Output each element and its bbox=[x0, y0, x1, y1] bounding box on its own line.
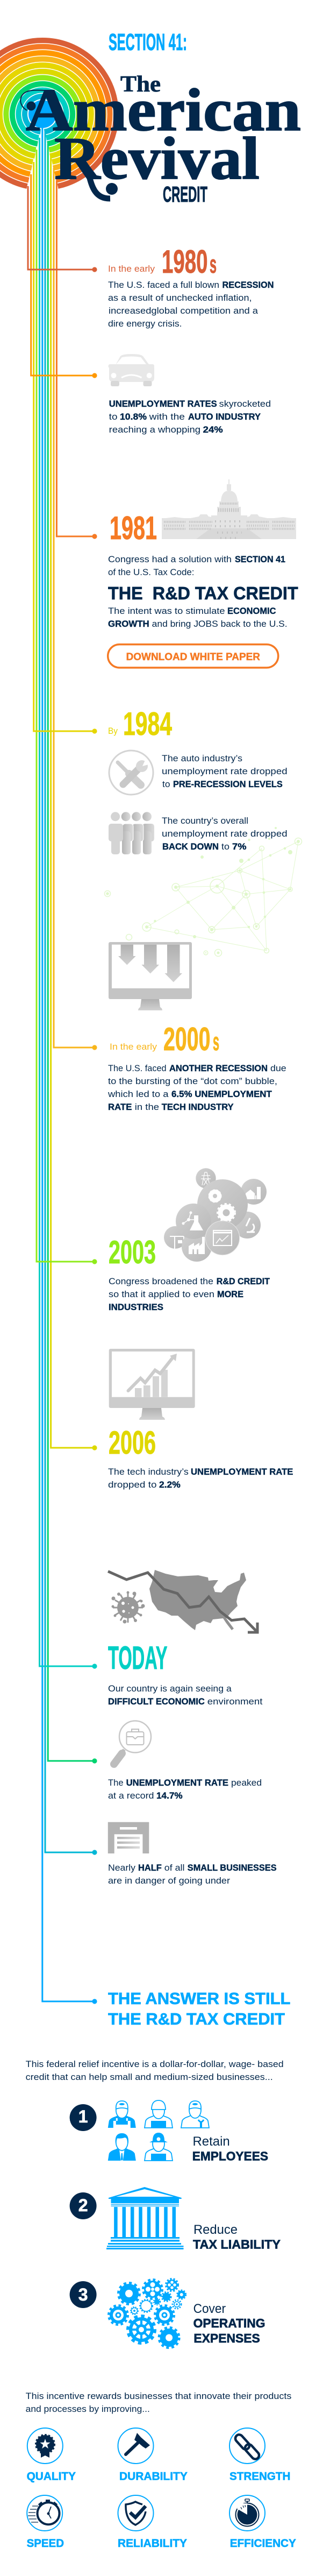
text: unemployment bbox=[109, 399, 271, 435]
text: peak unemployment: 14.7% bbox=[156, 1791, 183, 1801]
heading: 2006: 2006 bbox=[109, 1425, 156, 1461]
gear bbox=[155, 2306, 174, 2324]
text: broadened bbox=[109, 1276, 270, 1312]
section: early 2000s: s bbox=[213, 1028, 219, 1056]
text: country unemployment: unemployment rate dropped bbox=[162, 829, 288, 839]
icon: closed shop bbox=[108, 1822, 149, 1853]
gear bbox=[177, 2290, 186, 2299]
text: auto industry levels: PRE-RECESSION LEVELS bbox=[173, 779, 283, 789]
circle: power tower bbox=[196, 1168, 216, 1188]
circle: factory bbox=[182, 1232, 212, 1262]
badge: number 1: 1 bbox=[78, 2107, 88, 2126]
heading: in the early 1980s: s bbox=[210, 250, 217, 278]
label: DURABILITY bbox=[119, 2470, 188, 2482]
text: another recession: to the bursting of the “dot com” bubble, bbox=[108, 1076, 277, 1086]
icon: group of people bbox=[109, 812, 154, 854]
text: another recession: in the bbox=[135, 1102, 159, 1112]
text: country unemployment: BACK DOWN bbox=[162, 841, 219, 852]
section: 2003 bbox=[109, 1168, 270, 1312]
gear bbox=[109, 2306, 128, 2324]
button: download white paper: DOWNLOAD WHITE PAPER bbox=[126, 652, 260, 663]
text: auto industry levels: unemployment rate dropped bbox=[162, 766, 288, 776]
heading: 2003: 2003 bbox=[109, 1234, 156, 1270]
gear bbox=[143, 2280, 162, 2298]
heading: in the early 1980s: 1980 bbox=[162, 244, 207, 280]
text: federal relief incentive intro: This federal relief incentive is a dollar-for-dollar, wage- based bbox=[26, 2059, 284, 2069]
text: difficult environment bbox=[108, 1683, 263, 1707]
improvement: durability bbox=[118, 2428, 188, 2482]
gear bbox=[162, 2292, 171, 2302]
gear bbox=[166, 2279, 178, 2291]
text: broadened: R&D CREDIT bbox=[217, 1276, 270, 1286]
circle: chart window bbox=[205, 1221, 240, 1255]
benefit 3: cover operating expenses bbox=[70, 2279, 265, 2348]
improvement: speed bbox=[27, 2495, 64, 2550]
text: peak unemployment bbox=[108, 1778, 262, 1801]
worker: miner bbox=[145, 2133, 173, 2161]
label: RELIABILITY bbox=[118, 2537, 187, 2550]
heading: by 1984: By bbox=[108, 726, 118, 736]
text: difficult environment: Our country is again seeing a bbox=[108, 1683, 232, 1694]
text: another recession: which led to a bbox=[107, 1089, 169, 1099]
heading: by 1984: 1984 bbox=[123, 706, 172, 742]
section: today bbox=[108, 1570, 290, 2028]
badge: number 2: 2 bbox=[78, 2196, 88, 2215]
text: tech unemployment: 2.2% bbox=[159, 1480, 181, 1490]
text: broadened: so that it applied to even bbox=[109, 1289, 214, 1299]
eyebrow: section 41: SECTION 41: bbox=[109, 30, 187, 55]
text: recession: as a result of unchecked inflation, bbox=[108, 293, 252, 303]
text: unemployment: 10.8% bbox=[120, 412, 147, 422]
text: intent: The intent was to stimulate bbox=[108, 606, 225, 616]
badge: number 3 bbox=[70, 2281, 97, 2308]
title: credit: CREDIT bbox=[163, 182, 207, 207]
text: federal relief incentive intro bbox=[26, 2059, 284, 2082]
gear bbox=[128, 2316, 155, 2343]
icon: fast stopwatch bbox=[27, 2495, 62, 2531]
section: early 1980s bbox=[108, 244, 274, 435]
text: intent: GROWTH bbox=[108, 619, 149, 629]
icon: tools bbox=[109, 751, 153, 795]
gear bbox=[131, 2307, 138, 2315]
icon: chain link bbox=[229, 2428, 265, 2464]
improvement: efficiency bbox=[229, 2495, 296, 2550]
heading: the answer is still the r&d tax credit: THE ANSWER IS STILL bbox=[108, 1990, 290, 2008]
title block bbox=[20, 30, 301, 207]
title: The: The bbox=[120, 72, 161, 97]
rainbow rings bbox=[0, 40, 116, 186]
icon: monitor with down arrows bbox=[109, 942, 192, 1010]
icon: virus bbox=[112, 1591, 145, 1624]
text: country unemployment: to bbox=[221, 841, 229, 852]
text: another recession: due bbox=[270, 1063, 286, 1073]
icon: US map with falling line bbox=[108, 1570, 257, 1632]
icon: shield check bbox=[118, 2495, 154, 2531]
text: unemployment: skyrocketed bbox=[219, 399, 271, 409]
section: 2006 bbox=[108, 1349, 293, 1490]
circle: crane bbox=[164, 1226, 186, 1249]
heading: the answer is still the r&d tax credit bbox=[108, 1990, 290, 2028]
label: STRENGTH bbox=[229, 2470, 290, 2482]
text: peak unemployment: The bbox=[108, 1778, 124, 1788]
heading: today: TODAY bbox=[108, 1640, 168, 1676]
text: another recession: ANOTHER RECESSION bbox=[169, 1063, 268, 1073]
heading: by 1984 bbox=[108, 706, 172, 742]
text: tech unemployment: UNEMPLOYMENT RATE bbox=[191, 1467, 293, 1477]
label: SPEED bbox=[27, 2537, 64, 2550]
text: country unemployment: The country’s overall bbox=[162, 816, 248, 826]
text: another recession: RATE bbox=[108, 1102, 132, 1112]
badge: number 2 bbox=[70, 2192, 97, 2219]
text: small businesses bbox=[108, 1863, 277, 1886]
gear bbox=[140, 2299, 153, 2312]
worker: mechanic bbox=[181, 2101, 209, 2128]
text: recession: dire energy crisis. bbox=[108, 319, 182, 329]
icon: industry circles cluster bbox=[164, 1168, 267, 1262]
worker: overalls and cap bbox=[108, 2101, 136, 2128]
benefit 1: retain employees bbox=[70, 2100, 268, 2163]
text: incentive rewards intro bbox=[26, 2391, 291, 2414]
text: another recession: The U.S. faced bbox=[108, 1063, 167, 1073]
label: retain employees: EMPLOYEES bbox=[192, 2149, 268, 2163]
icon: cluster of gears bbox=[109, 2279, 186, 2348]
text: unemployment: 24% bbox=[203, 424, 223, 435]
gear bbox=[154, 2298, 160, 2305]
text: tech unemployment: dropped to bbox=[108, 1480, 157, 1490]
text: incentive rewards intro: and processes by improving... bbox=[26, 2404, 150, 2414]
gear bbox=[118, 2283, 140, 2304]
section: 1981 bbox=[108, 479, 298, 668]
label: retain employees bbox=[192, 2134, 268, 2163]
text: unemployment: UNEMPLOYMENT RATES bbox=[109, 399, 217, 409]
text: small businesses: HALF bbox=[138, 1863, 162, 1873]
icon: classical temple bbox=[106, 2187, 184, 2249]
label: cover operating expenses bbox=[193, 2302, 265, 2345]
text: small businesses: are in danger of going under bbox=[108, 1876, 230, 1886]
text: congress solution: Congress had a solution with bbox=[108, 554, 232, 564]
text: unemployment: reaching a whopping bbox=[109, 424, 200, 435]
text: intent bbox=[108, 606, 288, 629]
worker: business suit bbox=[108, 2133, 136, 2161]
icon: workers bbox=[108, 2100, 209, 2161]
text: unemployment: to bbox=[109, 412, 117, 422]
benefit 2: reduce tax liability bbox=[70, 2187, 281, 2252]
text: country unemployment bbox=[162, 816, 288, 852]
title: Revival: Revival bbox=[54, 125, 260, 192]
text: tech unemployment: The tech industry’s bbox=[108, 1467, 189, 1477]
heading: the r&d tax credit: THE R&D TAX CREDIT bbox=[108, 584, 298, 604]
icon: sad car bbox=[109, 354, 154, 386]
text: congress solution: SECTION 41 bbox=[235, 554, 285, 564]
heading: the answer is still the r&d tax credit: THE R&D TAX CREDIT bbox=[108, 2010, 285, 2028]
icon: capitol building bbox=[162, 479, 296, 539]
label: reduce tax liability: Reduce bbox=[193, 2223, 238, 2237]
label: cover operating expenses: OPERATING bbox=[193, 2316, 265, 2330]
improvement: strength bbox=[229, 2428, 290, 2482]
circle: gears bbox=[197, 1179, 248, 1230]
improvement: reliability bbox=[118, 2495, 187, 2550]
icon: magnifier with briefcase bbox=[114, 1721, 151, 1764]
text: small businesses: Nearly bbox=[108, 1863, 136, 1873]
section: 1984 bbox=[104, 706, 302, 957]
icon: timer bbox=[229, 2495, 265, 2531]
text: another recession bbox=[107, 1063, 286, 1112]
label: reduce tax liability: TAX LIABILITY bbox=[193, 2238, 281, 2252]
title: American: American bbox=[26, 77, 301, 144]
text: country unemployment: 7% bbox=[232, 841, 246, 852]
label: cover operating expenses: Cover bbox=[193, 2302, 226, 2316]
heading: 1981: 1981 bbox=[110, 510, 157, 546]
heading: in the early 2000s bbox=[110, 1021, 219, 1057]
text: incentive rewards intro: This incentive rewards businesses that innovate their products bbox=[26, 2391, 291, 2401]
text: another recession: TECH INDUSTRY bbox=[162, 1102, 234, 1112]
icon: hammer bbox=[118, 2428, 154, 2464]
icon: award badge bbox=[27, 2428, 63, 2464]
text: broadened: Congress broadened the bbox=[109, 1276, 213, 1286]
heading: in the early 1980s: In the early bbox=[108, 264, 155, 274]
text: congress solution bbox=[108, 554, 285, 577]
text: another recession: 6.5% UNEMPLOYMENT bbox=[171, 1089, 272, 1099]
text: small businesses: SMALL BUSINESSES bbox=[188, 1863, 277, 1873]
gear bbox=[173, 2300, 181, 2309]
heading: in the early 2000s: In the early bbox=[110, 1042, 157, 1052]
text: recession bbox=[108, 280, 274, 329]
worker: hard hat bbox=[145, 2100, 173, 2128]
circle: flask bbox=[176, 1204, 211, 1239]
text: broadened: INDUSTRIES bbox=[109, 1302, 163, 1312]
improvement: quality bbox=[27, 2428, 76, 2482]
text: auto industry levels: to bbox=[162, 779, 170, 789]
heading: in the early 2000s: 2000 bbox=[163, 1021, 211, 1057]
label: cover operating expenses: EXPENSES bbox=[193, 2331, 260, 2345]
text: recession: The U.S. faced a full blown bbox=[108, 280, 219, 290]
text: tech unemployment bbox=[108, 1467, 293, 1490]
timeline lines and connectors bbox=[28, 128, 97, 2004]
text: auto industry levels: The auto industry’s bbox=[162, 753, 242, 763]
circle: farm bbox=[241, 1179, 267, 1205]
text: auto industry levels bbox=[162, 753, 288, 789]
text: federal relief incentive intro: credit that can help small and medium-sized businesses... bbox=[26, 2072, 273, 2082]
text: unemployment: with the bbox=[149, 412, 185, 422]
text: difficult environment: DIFFICULT ECONOMIC bbox=[108, 1696, 205, 1707]
button: download white paper bbox=[108, 645, 278, 668]
badge: number 1 bbox=[70, 2104, 97, 2131]
label: retain employees: Retain bbox=[192, 2134, 230, 2149]
text: peak unemployment: UNEMPLOYMENT RATE bbox=[126, 1778, 228, 1788]
text: peak unemployment: peaked bbox=[231, 1778, 262, 1788]
text: congress solution: of the U.S. Tax Code: bbox=[108, 567, 195, 577]
label: reduce tax liability bbox=[193, 2223, 281, 2252]
text: small businesses: of all bbox=[164, 1863, 185, 1873]
badge: number 3: 3 bbox=[78, 2285, 88, 2304]
label: QUALITY bbox=[27, 2470, 76, 2482]
heading: in the early 1980s bbox=[108, 244, 217, 280]
icon: monitor with rising chart bbox=[109, 1349, 195, 1420]
network graphic bbox=[104, 827, 302, 957]
text: recession: RECESSION bbox=[222, 280, 274, 290]
text: intent: and bring JOBS back to the U.S. bbox=[152, 619, 288, 629]
section: early 2000s bbox=[107, 942, 286, 1112]
text: recession: increasedglobal competition and a bbox=[109, 306, 259, 316]
circle: microscope bbox=[234, 1212, 261, 1239]
label: EFFICIENCY bbox=[230, 2537, 296, 2550]
text: unemployment: AUTO INDUSTRY bbox=[188, 412, 261, 422]
text: peak unemployment: at a record bbox=[108, 1791, 154, 1801]
text: intent: ECONOMIC bbox=[227, 606, 276, 616]
text: broadened: MORE bbox=[217, 1289, 243, 1299]
gear bbox=[159, 2327, 179, 2348]
text: difficult environment: environment bbox=[207, 1696, 263, 1707]
